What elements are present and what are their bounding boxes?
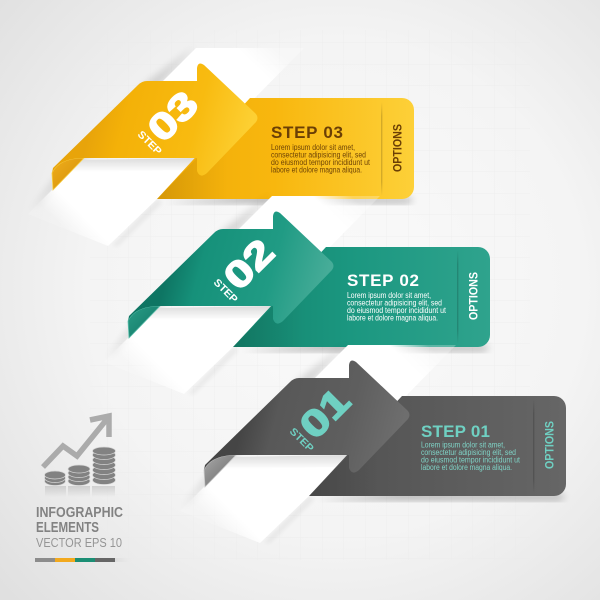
ribbon fold [204, 455, 236, 487]
coin stacks [44, 447, 116, 486]
text block: consectetur adipisicing elit, sed [271, 150, 366, 160]
white paper strip [28, 48, 304, 246]
panel: step 03 [28, 46, 414, 246]
info card [157, 98, 414, 199]
ribbon fold [128, 306, 160, 338]
options label: OPTIONS [390, 124, 404, 172]
text block: labore et dolore magna aliqua. [271, 166, 362, 174]
white paper strip [104, 196, 380, 394]
colour bar [35, 558, 137, 562]
info card [309, 396, 566, 496]
ribbon fold [52, 158, 84, 190]
text block [347, 291, 447, 322]
text block: do eiusmod tempor incididunt ut [347, 306, 447, 315]
label step: STEP [287, 426, 316, 455]
heading: STEP 02 [347, 271, 419, 290]
text block: do eiusmod tempor incididunt ut [271, 158, 371, 167]
label step: STEP [135, 129, 164, 158]
text block: consectetur adipisicing elit, sed [421, 448, 516, 457]
text block: labore et dolore magna aliqua. [421, 463, 512, 472]
number 02: 02 [216, 231, 282, 298]
panel: step 02 [104, 194, 490, 394]
options label: OPTIONS [466, 272, 480, 320]
title: infographic elements: VECTOR EPS 10 [36, 535, 122, 550]
title: infographic elements: ELEMENTS [36, 520, 99, 536]
options label: OPTIONS [542, 421, 556, 469]
icon: growth arrow with coins [43, 416, 116, 497]
growth arrow [43, 416, 109, 467]
text block: labore et dolore magna aliqua. [347, 314, 438, 322]
text block: Lorem ipsum dolor sit amet, [347, 291, 431, 300]
text block: do eiusmod tempor incididunt ut [421, 456, 521, 464]
number 03: 03 [140, 83, 206, 150]
title: infographic elements: INFOGRAPHIC [36, 505, 123, 521]
heading: STEP 01 [421, 422, 490, 441]
info card [233, 247, 490, 347]
arrow [204, 361, 410, 473]
title: infographic elements [36, 505, 123, 550]
text block: Lorem ipsum dolor sit amet, [271, 143, 355, 152]
text block: consectetur adipisicing elit, sed [347, 298, 442, 308]
coin reflection [45, 486, 115, 497]
text block [421, 440, 521, 472]
text block: Lorem ipsum dolor sit amet, [421, 440, 505, 450]
label step: STEP [211, 277, 240, 306]
heading: STEP 03 [271, 123, 343, 142]
arrow [128, 212, 334, 324]
white paper strip [180, 345, 456, 543]
panel: step 01 [180, 343, 566, 543]
number 01: 01 [292, 380, 358, 447]
arrow [52, 64, 258, 176]
text block [271, 143, 371, 174]
